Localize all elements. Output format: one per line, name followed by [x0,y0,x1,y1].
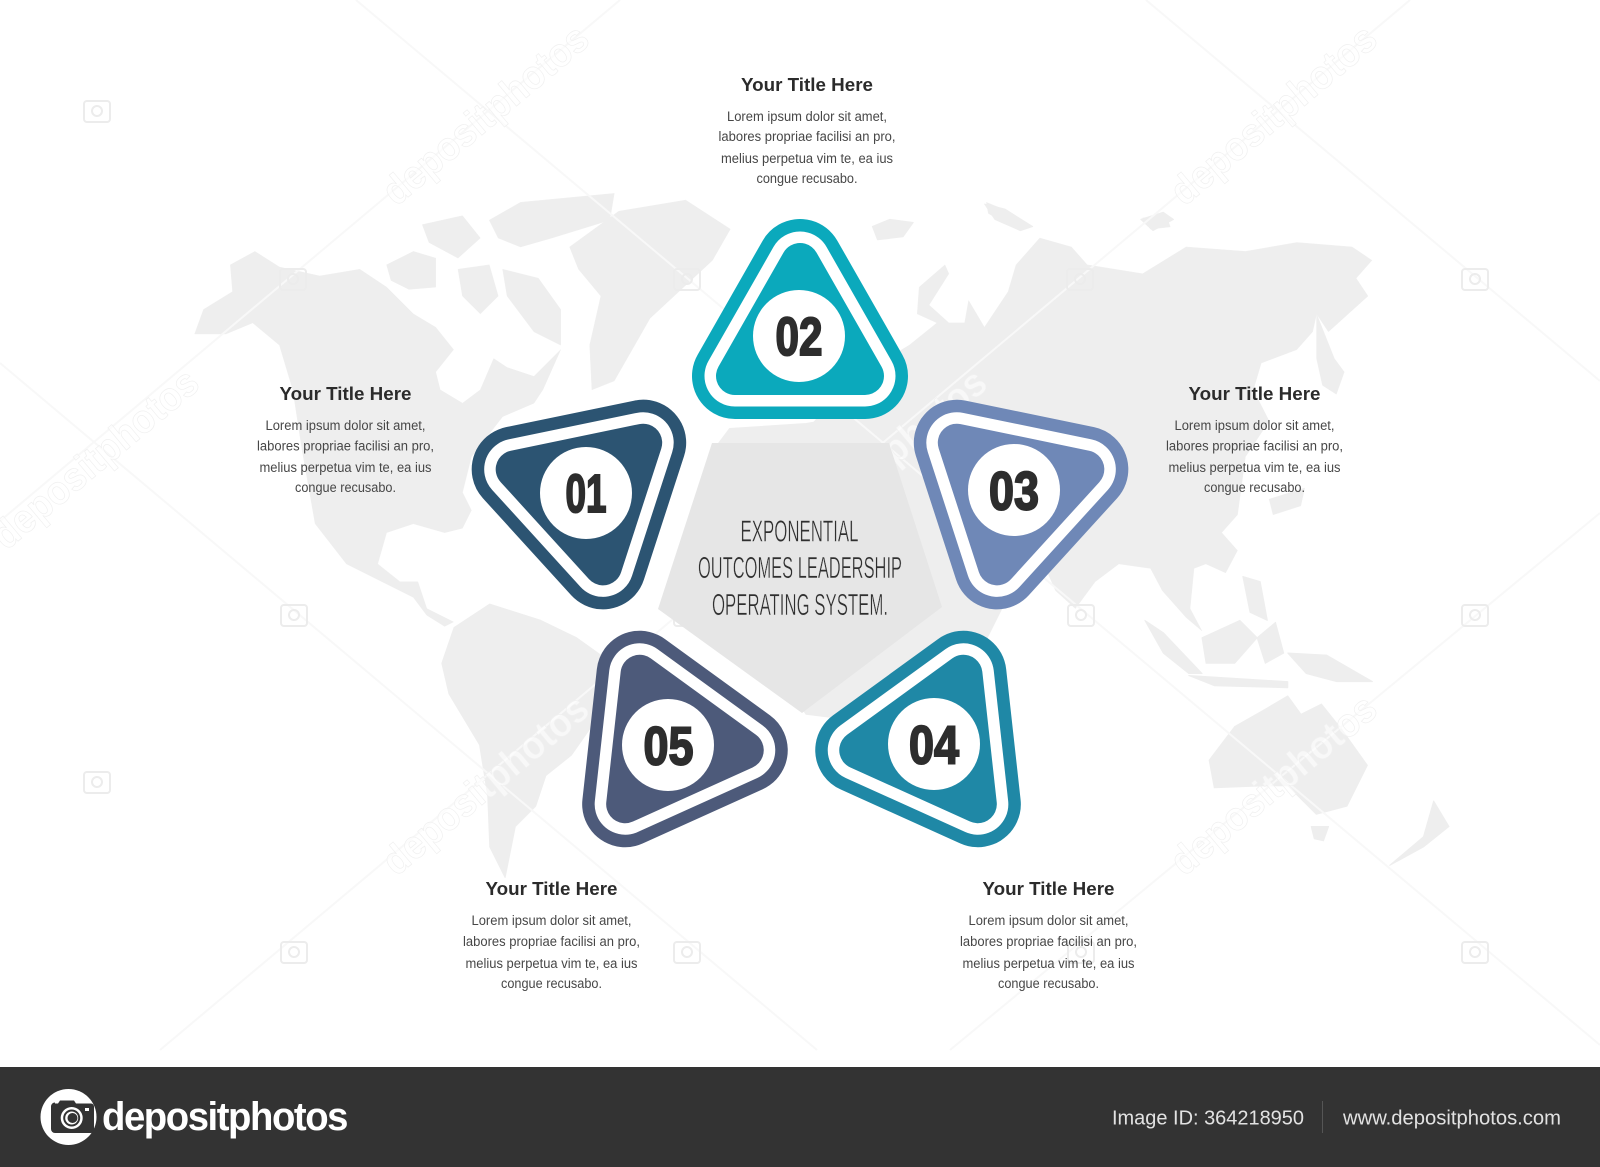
panel: step 04 triangle: 04 [909,716,959,776]
text block: step 04: labores propriae facilisi an pro, [960,934,1137,949]
text block: step 04: Your Title Here [982,878,1114,899]
text block: step 01: melius perpetua vim te, ea ius [260,460,432,475]
image id: Image ID: 364218950 [1112,1108,1304,1130]
text block: step 02: Your Title Here [741,74,873,95]
panel: step 04 triangle [858,674,1030,842]
watermark: diagonal logos and camera marks: depositphotos [772,360,995,558]
text block: step 03 [1166,383,1343,495]
watermark: diagonal logos and camera marks: depositphotos [374,686,597,884]
center heading: OUTCOMES LEADERSHIP [698,551,902,585]
footer bar [0,1067,1600,1167]
text block: step 04: melius perpetua vim te, ea ius [962,956,1135,971]
Indonesia [1145,620,1202,673]
text block: step 05: melius perpetua vim te, ea ius [466,956,638,971]
text block: step 05: Your Title Here [486,878,618,899]
text block: step 05 [463,878,640,991]
Eurasia [791,238,1372,631]
text block: step 02: congue recusabo. [756,171,858,186]
South America [442,604,612,878]
center pentagon [658,443,942,713]
text block: step 05: Lorem ipsum dolor sit amet, [472,913,632,928]
text block: step 01 [257,383,434,495]
panel: step 02 triangle [735,262,865,382]
text block: step 01: Your Title Here [280,383,412,404]
text block: step 05: congue recusabo. [501,976,602,991]
center heading [698,515,902,622]
text block: step 01: labores propriae facilisi an pro, [257,438,434,454]
center heading: EXPONENTIAL [740,515,858,549]
Europe and Africa [714,408,1020,719]
panel: step 03 triangle [957,407,1105,566]
panel: step 05 triangle [573,674,745,842]
panel: step 01 triangle [495,407,643,566]
center heading: OPERATING SYSTEM. [712,588,888,622]
icon: camera logo [40,1089,96,1145]
text block: step 04: Lorem ipsum dolor sit amet, [968,913,1128,928]
world map background [195,193,1449,878]
text block: step 04 [960,878,1137,991]
text block: step 03: congue recusabo. [1204,480,1305,495]
text block: step 03: melius perpetua vim te, ea ius [1168,460,1341,475]
text block: step 04: congue recusabo. [998,976,1099,991]
Australia [1209,696,1367,814]
text block: step 03: labores propriae facilisi an pro, [1166,438,1343,454]
panel: step 03 triangle: 03 [989,462,1039,522]
watermark: diagonal logos and camera marks: depositphotos [1162,686,1385,884]
text block: step 02: melius perpetua vim te, ea ius [721,151,893,166]
text block: step 05: labores propriae facilisi an pro, [463,934,640,949]
watermark: diagonal logos and camera marks: depositphotos [1162,16,1385,214]
text block: step 02 [718,74,896,186]
watermark: diagonal logos and camera marks: depositphotos [374,16,597,214]
panel: step 02 triangle: 02 [776,307,822,367]
text block: step 01: Lorem ipsum dolor sit amet, [266,418,426,433]
text block: step 03: Lorem ipsum dolor sit amet, [1174,418,1334,433]
text block: step 02: labores propriae facilisi an pro, [718,129,896,144]
panel: step 01 triangle: 01 [566,464,606,524]
text block: step 02: Lorem ipsum dolor sit amet, [727,109,887,124]
text block: step 01: congue recusabo. [295,480,396,495]
logo wordmark: depositphotos [102,1095,347,1139]
panel: step 05 triangle: 05 [644,716,694,776]
text block: step 03: Your Title Here [1188,383,1320,404]
website url: www.depositphotos.com [1342,1108,1561,1130]
